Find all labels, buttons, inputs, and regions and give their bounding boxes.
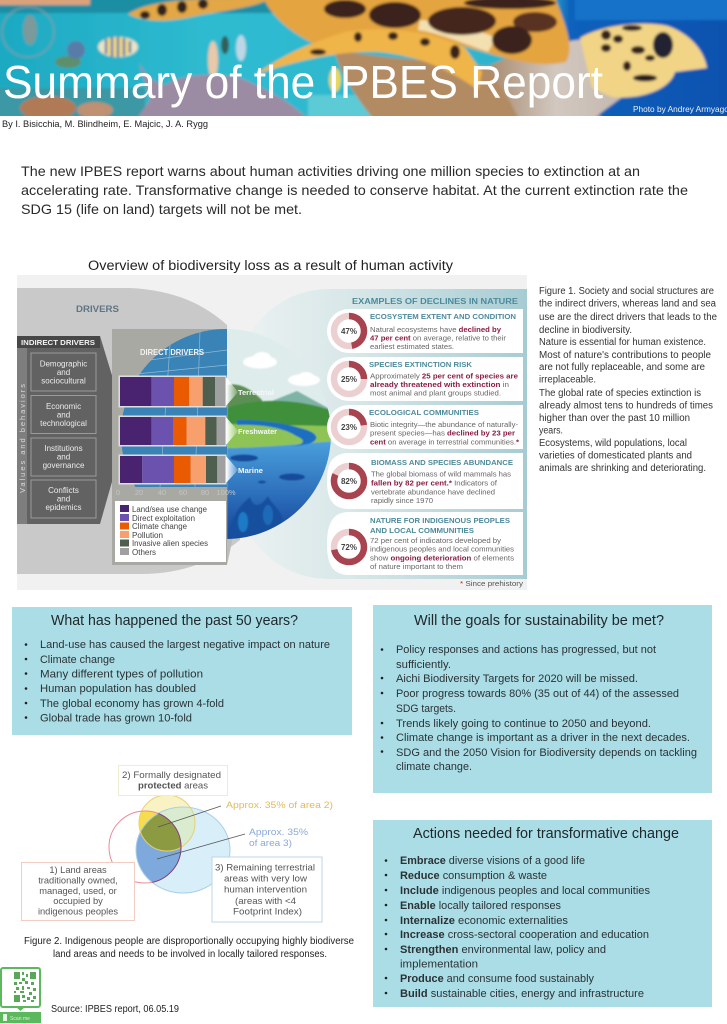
panel: indirect drivers: Institutions: [44, 444, 83, 453]
panel: indirect drivers: Economic: [46, 402, 81, 411]
figure 1 caption: Figure 1. Society and social structures are: [539, 286, 714, 297]
bullet list: Enable locally tailored responses: [400, 900, 561, 912]
item: ecosystem extent and condition: 47%: [341, 327, 357, 336]
callout: indigenous lands: managed, used, or: [39, 886, 117, 896]
chart legend: Others: [132, 548, 156, 557]
panel: indirect drivers: Demographic: [40, 360, 87, 368]
item: biomass and species abundance: 82%: [341, 477, 357, 486]
item: nature for indigenous peoples: indigenous peoples and local communities: [370, 544, 514, 554]
QR code: scan me: [0, 968, 41, 1023]
chart legend: Land/sea use change: [132, 505, 208, 514]
panel: indirect drivers: and: [57, 494, 70, 504]
item: biomass and species abundance: vertebrate abundance have declined: [371, 488, 495, 496]
figure 1 caption: decline in biodiversity.: [539, 325, 632, 336]
annotation: share of area 3: [249, 827, 309, 849]
bar chart: drivers by realm: 60: [179, 488, 187, 497]
item: ecosystem extent and condition: ECOSYSTEM EXTENT AND CONDITION: [370, 312, 516, 321]
chart legend: [115, 501, 226, 562]
bullet list: Embrace diverse visions of a good life: [400, 855, 585, 867]
item: biomass and species abundance: rapidly since 1970: [371, 496, 433, 505]
panel: indirect drivers: and: [57, 410, 70, 420]
callout: low-intervention areas: human intervention: [224, 884, 307, 894]
chart legend: Pollution: [132, 531, 163, 540]
realm labels: Marine: [238, 466, 263, 475]
item: species extinction risk: Approximately 25 per cent of species are: [370, 372, 518, 380]
intro paragraph: accelerating rate. Transformative change is needed to conserve habitat. At the current extinction rate the: [21, 182, 688, 198]
figure 1 caption: already almost tens to hundreds of times: [539, 400, 713, 412]
panel: indirect drivers: and: [57, 452, 70, 462]
panel: actions needed for transformative change: [373, 820, 712, 1007]
panel: indirect drivers: INDIRECT DRIVERS: [21, 338, 95, 347]
callout: low-intervention areas: [212, 857, 322, 922]
panel: indirect drivers: and: [57, 368, 70, 377]
callout: indigenous lands: traditionally owned,: [38, 876, 118, 886]
item: ecological communities: ECOLOGICAL COMMUNITIES: [369, 408, 479, 417]
realm labels: Freshwater: [238, 427, 277, 436]
footnote: * Since prehistory: [460, 579, 523, 588]
bullet list: The global economy has grown 4-fold: [40, 698, 224, 710]
callout: protected areas: protected areas: [138, 780, 208, 790]
chart legend: Direct exploitation: [132, 514, 195, 523]
callout: protected areas: [118, 766, 228, 796]
examples heading: EXAMPLES OF DECLINES IN NATURE: [352, 296, 518, 306]
annotation: share of area 3: Approx. 35%: [249, 827, 309, 838]
bullet list: Global trade has grown 10-fold: [40, 712, 192, 724]
item: species extinction risk: [327, 357, 523, 401]
bar chart: drivers by realm: 80: [201, 488, 209, 497]
figure 2 caption: land areas and needs to be involved in locally tailored responses.: [53, 949, 327, 960]
callout: low-intervention areas: 3) Remaining terrestrial: [215, 862, 315, 872]
item: species extinction risk: most animal and plant groups studied.: [370, 388, 501, 398]
figure 1 caption: Ecosystems, wild populations, local: [539, 438, 687, 449]
bullet list: SDG targets.: [396, 703, 456, 715]
chart legend: Invasive alien species: [132, 539, 208, 548]
bullet list: Policy responses and actions has progressed, but not: [396, 644, 656, 656]
bullet list: Poor progress towards 80% (35 out of 44) of the assessed: [396, 688, 679, 700]
bullet list: Reduce consumption & waste: [400, 870, 547, 882]
bullet list: Strengthen environmental law, policy and: [400, 944, 606, 956]
callout: low-intervention areas: Footprint Index): [233, 906, 302, 916]
chart legend: Climate change: [132, 522, 188, 531]
bullet list: Increase cross-sectoral cooperation and education: [400, 929, 649, 941]
panel: indirect drivers: governance: [43, 461, 85, 470]
figure 1 caption: higher than over the past 10 million: [539, 413, 690, 424]
bullet list: Include indigenous peoples and local communities: [400, 885, 650, 897]
item: nature for indigenous peoples: AND LOCAL COMMUNITIES: [370, 526, 474, 535]
figure 1 caption: animals are shrinking and deteriorating.: [539, 463, 706, 474]
callout: indigenous lands: [22, 862, 134, 920]
realm labels: [238, 388, 277, 475]
bar chart: drivers by realm: 20: [135, 488, 143, 497]
bullet list: Climate change: [40, 654, 115, 666]
header photo: sea turtle and reef fish: [0, 0, 727, 121]
figure 1 caption: use are the direct drivers that leads to the: [539, 312, 717, 323]
annotation: share of area 2: Approx. 35% of area 2): [226, 800, 333, 811]
item: nature for indigenous peoples: NATURE FOR INDIGENOUS PEOPLES: [370, 516, 510, 525]
panel: indirect drivers: Conflicts: [48, 486, 79, 495]
panel: direct drivers: [112, 329, 277, 565]
item: nature for indigenous peoples: show ongoing deterioration of elements: [370, 554, 514, 562]
item: nature for indigenous peoples: [327, 512, 523, 575]
item: ecological communities: cent on average in terrestrial communities. *: [370, 438, 519, 446]
item: ecological communities: [327, 405, 523, 449]
panel: indirect drivers: epidemics: [45, 503, 82, 512]
bullet list: implementation: [400, 958, 478, 970]
item: ecosystem extent and condition: earliest estimated states.: [370, 342, 454, 351]
figure 1 caption: Most of nature's contributions to people: [539, 350, 711, 361]
item: species extinction risk: 25%: [341, 375, 357, 384]
bullet list: Produce and consume food sustainably: [400, 973, 595, 985]
item: biomass and species abundance: The global biomass of wild mammals has: [371, 470, 511, 478]
bullet list: Many different types of pollution: [40, 668, 203, 680]
callout: indigenous lands: indigenous peoples: [38, 906, 118, 916]
realm labels: Terrestrial: [238, 388, 274, 397]
item: ecosystem extent and condition: Natural ecosystems have declined by: [370, 325, 502, 334]
bullet list: Build sustainable cities, energy and infrastructure: [400, 988, 644, 1000]
globe: terrestrial, freshwater, marine: [227, 329, 338, 545]
bullet list: sufficiently.: [396, 659, 451, 671]
bar chart: drivers by realm: 40: [158, 488, 166, 497]
figure 2 caption: Figure 2. Indigenous people are disproportionally occupying highly biodiverse: [24, 936, 354, 947]
callout: indigenous lands: occupied by: [53, 896, 103, 906]
item: nature for indigenous peoples: of nature important to them: [370, 562, 463, 571]
bar chart: drivers by realm: 100%: [216, 488, 236, 497]
drivers heading: DRIVERS: [76, 304, 119, 314]
callout: low-intervention areas: areas with very low: [224, 874, 307, 884]
figure 1 caption: years.: [539, 426, 563, 436]
panel: indirect drivers: [17, 336, 121, 524]
callout: protected areas: 2) Formally designated: [122, 770, 221, 780]
bar chart: drivers by realm: [116, 376, 238, 497]
item: ecological communities: present species—has declined by 23 per: [370, 428, 515, 438]
figure 1 caption: Nature is essential for human existence.: [539, 337, 706, 348]
authors byline: By I. Bisicchia, M. Blindheim, E. Majcic, J. A. Rygg: [2, 119, 208, 130]
item: species extinction risk: already threatened with extinction in: [370, 380, 509, 389]
panel: direct drivers: DIRECT DRIVERS: [140, 348, 205, 357]
panel: indirect drivers: Values and behaviors: [18, 384, 27, 493]
figure heading: Overview of biodiversity loss as a result of human activity: [88, 258, 453, 273]
clouds: [243, 352, 320, 386]
bullet list: Internalize economic externalities: [400, 915, 568, 927]
item: ecosystem extent and condition: [327, 309, 523, 353]
bullet list: Climate change is important as a driver in the next decades.: [396, 732, 690, 744]
item: ecological communities: 23%: [341, 423, 357, 432]
callout: low-intervention areas: (areas with <4: [235, 896, 296, 906]
figure 1: drivers and declines in nature: [17, 275, 527, 590]
panel heading: What has happened the past 50 years?: [51, 613, 298, 629]
item: nature for indigenous peoples: 72%: [341, 543, 357, 552]
callout: indigenous lands: 1) Land areas: [49, 865, 107, 875]
bullet list: SDG and the 2050 Vision for Biodiversity depends on tackling: [396, 747, 697, 759]
item: biomass and species abundance: [327, 453, 523, 509]
bullet list: [25, 639, 330, 724]
item: ecological communities: Biotic integrity—the abundance of naturally-: [370, 420, 519, 429]
title: Summary of the IPBES Report: [3, 56, 603, 108]
intro paragraph: The new IPBES report warns about human activities driving one million species to extinction at an: [21, 163, 640, 179]
item: species extinction risk: SPECIES EXTINCTION RISK: [369, 360, 473, 369]
bar chart: drivers by realm: 0: [116, 488, 120, 497]
item: nature for indigenous peoples: 72 per cent of indicators developed by: [370, 536, 501, 545]
item: biomass and species abundance: BIOMASS AND SPECIES ABUNDANCE: [371, 458, 513, 467]
bullet list: Trends likely going to continue to 2050 and beyond.: [396, 718, 651, 730]
panel: will the goals for sustainability be met: [373, 605, 712, 793]
panel: what has happened the past 50 years: [12, 607, 352, 735]
figure 2 caption: [24, 936, 354, 960]
bullet list: climate change.: [396, 761, 472, 773]
item: biomass and species abundance: fallen by 82 per cent.* Indicators of: [371, 478, 498, 488]
source line: Source: IPBES report, 06.05.19: [51, 1004, 179, 1015]
bullet list: Land-use has caused the largest negative impact on nature: [40, 639, 330, 651]
figure 1 caption: The global rate of species extinction is: [539, 388, 701, 399]
figure 1 caption: [539, 286, 717, 474]
bullet list: Aichi Biodiversity Targets for 2020 will be missed.: [396, 673, 638, 685]
figure 1 caption: the indirect drivers, whereas land and sea: [539, 298, 717, 310]
intro paragraph: SDG 15 (life on land) targets will not be met.: [21, 201, 302, 217]
bullet list: [385, 855, 650, 1000]
figure 1 caption: irreplaceable.: [539, 374, 596, 386]
bullet list: Human population has doubled: [40, 683, 196, 695]
QR code: scan me: Scan me: [10, 1016, 30, 1022]
panel heading: Will the goals for sustainability be met?: [414, 613, 664, 629]
annotation: share of area 3: of area 3): [249, 838, 292, 849]
figure 2: venn diagram of land areas: [22, 766, 333, 922]
venn circles: [109, 795, 230, 893]
panel: indirect drivers: technological: [40, 419, 87, 428]
panel: indirect drivers: sociocultural: [41, 376, 86, 386]
bullet list: [381, 644, 697, 773]
item: ecosystem extent and condition: 47 per cent on average, relative to their: [370, 334, 507, 342]
intro paragraph: [21, 163, 688, 217]
figure 1 caption: varieties of domesticated plants and: [539, 450, 692, 462]
figure 1 caption: are not fully replaceable, and some are: [539, 362, 705, 373]
panel heading: Actions needed for transformative change: [413, 826, 679, 842]
